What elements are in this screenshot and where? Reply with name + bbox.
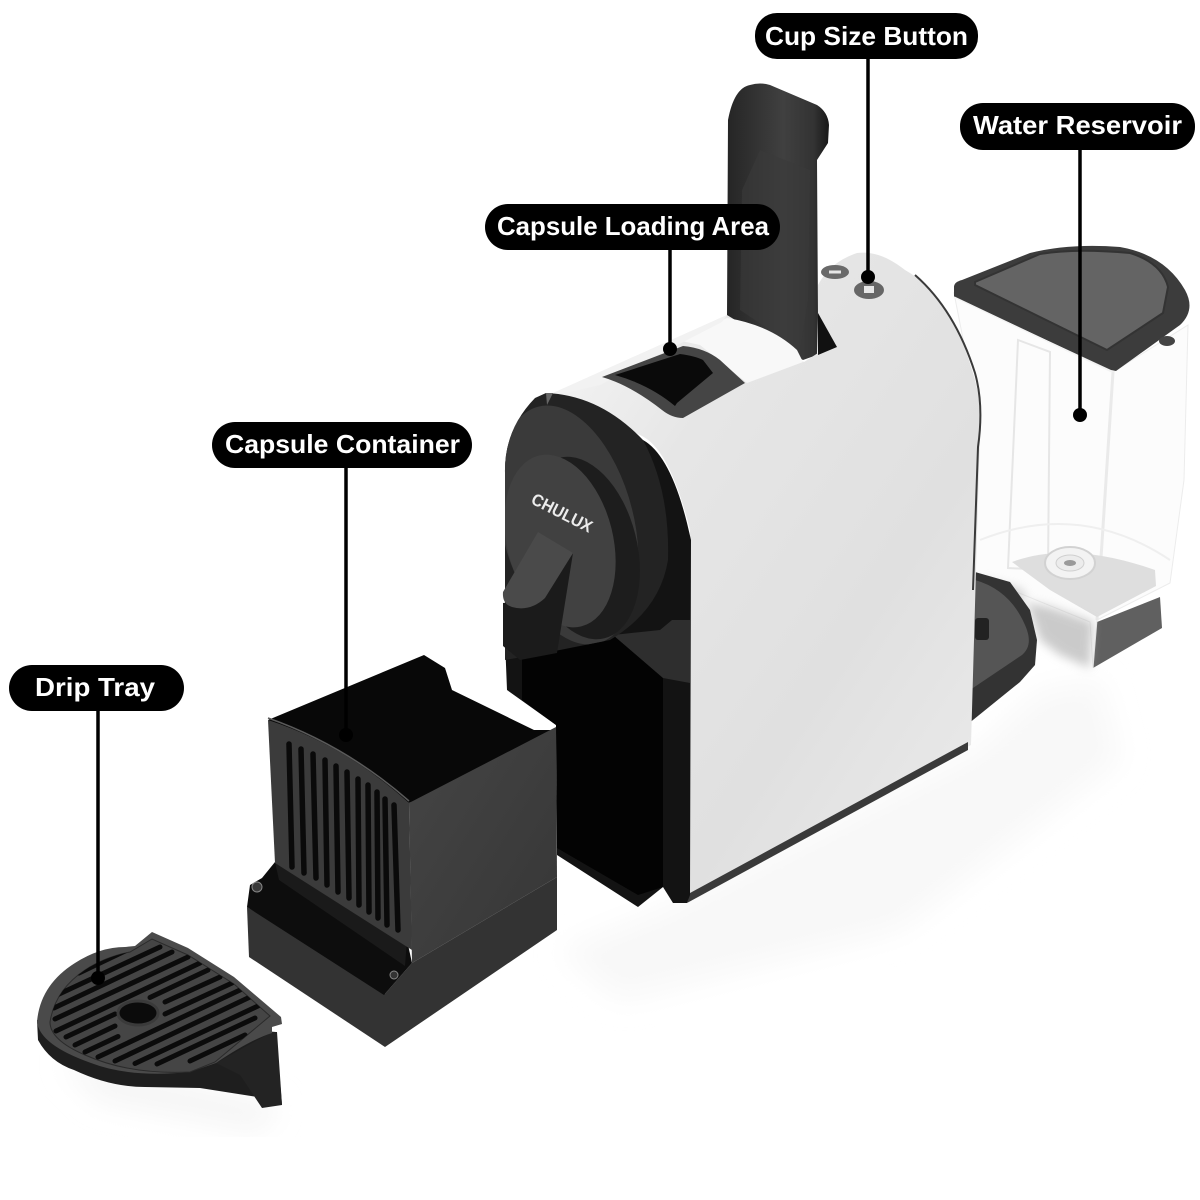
lever slot — [818, 313, 837, 355]
white body shell — [553, 253, 980, 896]
brew head — [502, 393, 668, 660]
tank valve — [1045, 547, 1095, 579]
callout: drip tray: Drip Tray — [35, 672, 156, 702]
capsule lever — [727, 84, 829, 360]
callout: capsule container: Capsule Container — [225, 429, 460, 459]
callout: water reservoir — [960, 103, 1195, 422]
machine base behind — [968, 572, 1093, 724]
reservoir lid — [954, 246, 1189, 371]
interior — [268, 655, 556, 803]
control buttons — [821, 265, 884, 299]
floor shadows — [60, 680, 1120, 1130]
slotted front panel — [268, 720, 412, 950]
water reservoir — [954, 246, 1189, 668]
callout: water reservoir: Water Reservoir — [973, 110, 1182, 140]
callout: cup size button — [755, 13, 978, 284]
grate hole — [118, 1001, 158, 1025]
callout: cup size button: Cup Size Button — [765, 21, 968, 51]
bottom edge — [687, 742, 968, 903]
right wall — [409, 727, 557, 963]
drip tray — [37, 932, 282, 1108]
transparent tank — [954, 293, 1188, 668]
callout: capsule loading area: Capsule Loading Area — [497, 211, 770, 241]
base box — [384, 877, 557, 1047]
tray body — [37, 1020, 282, 1105]
black front column — [505, 440, 691, 907]
callout: capsule container — [212, 422, 472, 742]
tray grate — [37, 932, 282, 1074]
brand logo: CHULUX — [528, 490, 596, 537]
capsule loading area — [602, 346, 745, 418]
reservoir dark base — [1093, 597, 1162, 668]
callout: capsule loading area — [485, 204, 780, 356]
capsule container — [247, 655, 557, 1047]
callout: drip tray — [9, 665, 184, 985]
grate slots — [54, 947, 258, 1064]
machine body — [474, 253, 980, 907]
white loading cover — [677, 318, 803, 383]
brew handle — [503, 532, 573, 660]
panel slots — [289, 744, 398, 930]
